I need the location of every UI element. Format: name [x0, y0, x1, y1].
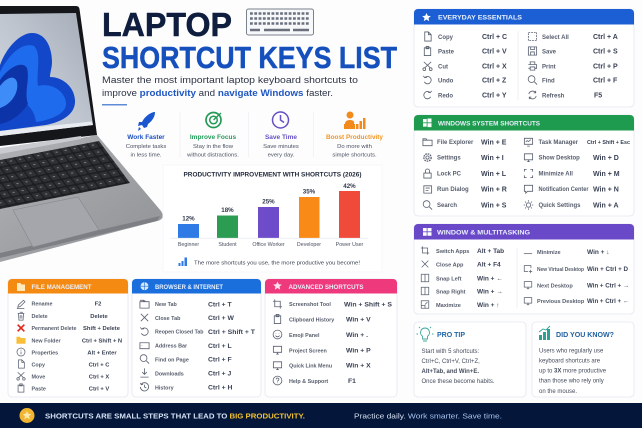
footer message: SHORTCUTS ARE SMALL STEPS THAT LEAD TO BIG PRODUCTIVITY.	[45, 411, 305, 420]
chart values: 18%	[221, 207, 234, 214]
chart category labels: Developer	[297, 242, 321, 248]
shortcut rows: Close Tab	[155, 316, 181, 322]
title	[102, 7, 397, 75]
shortcut rows	[140, 300, 256, 392]
shortcut rows: Copy	[438, 35, 454, 41]
shortcut rows: Next Desktop	[537, 284, 573, 290]
shortcut rows: Screenshot Tool	[289, 302, 331, 308]
panel: pro tip	[414, 322, 526, 397]
shortcut rows	[423, 32, 618, 100]
chart category labels: Student	[218, 242, 237, 248]
shortcut rows: Alt + F4	[477, 262, 501, 268]
shortcut rows: Refresh	[542, 94, 565, 100]
shortcut rows: Address Bar	[155, 344, 188, 350]
shortcut rows: Win + S	[481, 202, 507, 210]
shortcut rows: Ctrl + C	[89, 362, 110, 368]
shortcut rows: Ctrl + A	[593, 34, 618, 41]
shortcut rows: Print	[542, 64, 556, 70]
icon: keyboard	[246, 9, 314, 35]
shortcut rows: Win + M	[593, 171, 620, 178]
shortcut rows: Save	[542, 50, 557, 56]
header: file management: FILE MANAGEMENT	[32, 284, 92, 291]
shortcut rows: Ctrl + P	[593, 64, 618, 70]
icon: person with chart	[344, 112, 366, 129]
shortcut rows: Paste	[438, 50, 455, 56]
shortcut rows: Task Manager	[538, 140, 579, 146]
shortcut rows: Find on Page	[155, 358, 189, 364]
shortcut rows: New Folder	[32, 338, 61, 344]
tip text: Alt+Tab, and Win+E.	[422, 369, 479, 375]
shortcut rows: Ctrl + V	[482, 48, 507, 56]
shortcut rows: Close App	[436, 262, 464, 268]
header: window and multitasking	[414, 224, 634, 240]
shortcut rows: Undo	[438, 78, 454, 84]
shortcut rows: Ctrl + Shift + T	[208, 329, 256, 336]
shortcut rows: Settings	[437, 156, 461, 162]
shortcut rows: Paste	[32, 386, 46, 392]
benefit: save time: every day.	[268, 152, 295, 158]
bar chart panel	[163, 165, 382, 272]
benefit: boost productivity: Do more with	[337, 144, 372, 150]
subtitle	[102, 75, 358, 99]
laptop illustration	[0, 6, 163, 262]
shortcut rows: Move	[32, 374, 45, 380]
shortcut rows: New Virtual Desktop	[537, 267, 584, 273]
shortcut rows: History	[155, 386, 174, 392]
shortcut rows: Run Dialog	[437, 187, 469, 193]
shortcut rows: Copy	[32, 362, 45, 368]
shortcut rows: Ctrl + X	[482, 64, 507, 70]
accent rule	[102, 104, 127, 106]
benefit: save time	[263, 112, 299, 158]
fact text: up to 3X more productive	[539, 368, 607, 374]
benefit: improve focus: Stay in the flow	[193, 144, 234, 150]
shortcut rows: Quick Link Menu	[289, 364, 332, 370]
fact text: Users who regularly use	[539, 349, 604, 355]
icon: rocket	[138, 112, 155, 131]
header: everyday essentials	[414, 9, 634, 24]
shortcut rows: Ctrl + Shift + Esc	[587, 140, 630, 146]
shortcut rows: Ctrl + V	[89, 386, 109, 392]
shortcut rows: F1	[348, 378, 356, 385]
shortcut rows: Win + X	[346, 362, 371, 370]
header: windows system shortcuts: WINDOWS SYSTEM SHORTCUTS	[438, 120, 541, 128]
chart values	[182, 183, 356, 222]
shortcut rows: Win + E	[481, 140, 507, 146]
shortcut rows: Permanent Delete	[32, 326, 76, 332]
shortcut rows: Delete	[90, 314, 108, 320]
shortcut rows: Snap Left	[436, 276, 462, 282]
title: LAPTOP	[102, 7, 232, 44]
chart title: PRODUCTIVITY IMPROVEMENT WITH SHORTCUTS (2026)	[184, 172, 362, 178]
shortcut rows: Win + I	[481, 155, 504, 162]
benefit: work faster	[126, 112, 166, 158]
shortcut rows: Ctrl + Z	[482, 78, 507, 84]
shortcut rows: Snap Right	[436, 289, 466, 295]
fact text: than those who rely only	[539, 378, 604, 384]
shortcut rows: Win + →	[477, 288, 503, 296]
shortcut rows: Win + P	[346, 348, 371, 354]
subtitle: improve productivity and navigate Windows faster.	[102, 88, 333, 99]
benefit: work faster: Work Faster	[127, 134, 165, 141]
shortcut rows	[273, 299, 392, 385]
shortcut rows: Ctrl + C	[482, 34, 507, 41]
shortcut rows: Ctrl + H	[208, 384, 232, 392]
shortcut rows: Minimize	[537, 250, 561, 256]
icon: mini chart	[178, 258, 187, 266]
tip text	[422, 349, 495, 385]
shortcut rows: Rename	[32, 302, 52, 308]
shortcut rows: Show Desktop	[538, 156, 580, 162]
benefit: boost productivity	[326, 112, 383, 158]
shortcut rows: Project Screen	[289, 348, 327, 354]
benefit dividers	[180, 112, 314, 157]
shortcut rows: Cut	[438, 64, 448, 70]
shortcut rows: Win + N	[593, 186, 619, 194]
shortcut rows: Switch Apps	[436, 249, 469, 255]
title: SHORTCUT KEYS LIST	[102, 40, 397, 75]
fact text	[539, 349, 607, 395]
benefit: save time: Save Time	[265, 134, 297, 141]
shortcut rows: Ctrl + W	[208, 315, 234, 322]
shortcut rows: Ctrl + S	[593, 48, 618, 56]
shortcut rows: Previous Desktop	[537, 299, 585, 305]
subtitle: Master the most important laptop keyboard shortcuts to	[102, 75, 358, 86]
shortcut rows: Win + .	[346, 332, 368, 339]
icon: growth chart	[539, 326, 550, 340]
panel: window and multitasking	[414, 224, 634, 314]
chart category labels: Beginner	[178, 242, 199, 248]
benefit: boost productivity: Boost Productivity	[326, 134, 383, 141]
shortcut rows	[421, 246, 629, 309]
tip text: Ctrl+C, Ctrl+V, Ctrl+Z,	[422, 359, 480, 365]
shortcut rows: Shift + Delete	[83, 326, 121, 332]
shortcut rows: Win + R	[481, 186, 507, 194]
shortcut rows: New Tab	[155, 302, 177, 308]
panel: browser and internet	[132, 279, 261, 397]
shortcut rows: Properties	[32, 350, 58, 356]
shortcut rows: Ctrl + T	[208, 302, 232, 308]
shortcut rows: Delete	[32, 314, 48, 320]
shortcut rows: Help & Support	[289, 379, 328, 385]
panel: windows system shortcuts	[414, 115, 634, 216]
footer banner	[0, 403, 642, 428]
footer tagline: Practice daily. Work smarter. Save time.	[354, 411, 502, 420]
heading: PRO TIP	[437, 332, 465, 339]
shortcut rows: Downloads	[155, 372, 184, 378]
shortcut rows: Win + L	[481, 171, 507, 178]
shortcut rows: Alt + Tab	[477, 248, 504, 255]
shortcut rows: Win + ↓	[587, 249, 610, 256]
shortcut rows: Ctrl + L	[208, 343, 232, 350]
shortcut rows: Reopen Closed Tab	[155, 330, 204, 336]
shortcut rows: F2	[95, 302, 101, 308]
benefit: improve focus: without distractions.	[186, 152, 239, 158]
shortcut rows: Ctrl + J	[208, 370, 231, 378]
benefit: improve focus: Improve Focus	[190, 134, 237, 141]
chart values: 35%	[303, 188, 316, 196]
shortcut rows: Notification Center	[538, 187, 589, 193]
fact text: on the mouse.	[539, 389, 577, 395]
shortcut rows: File Explorer	[437, 140, 474, 146]
benefit: improve focus	[186, 112, 239, 158]
header: windows system shortcuts	[414, 115, 634, 130]
chart values: 42%	[343, 183, 356, 190]
shortcut rows: Ctrl + F	[593, 78, 618, 84]
shortcut rows: Win + Ctrl + ←	[587, 298, 629, 305]
shortcut rows: Maximize	[436, 303, 461, 309]
shortcut rows	[17, 300, 122, 392]
chart baseline	[170, 237, 368, 239]
panel: advanced shortcuts	[265, 279, 397, 397]
panel: everyday essentials	[414, 9, 634, 107]
shortcut rows: Ctrl + Shift + N	[82, 338, 122, 344]
chart category labels: Power User	[336, 242, 364, 248]
shortcut rows: Win + Ctrl + D	[587, 266, 628, 273]
shortcut rows: Ctrl + X	[89, 374, 109, 380]
chart values: 12%	[182, 216, 195, 222]
shortcut rows: Emoji Panel	[289, 333, 320, 339]
header: browser and internet: BROWSER & INTERNET	[155, 284, 223, 291]
shortcut rows	[423, 138, 630, 210]
header: everyday essentials: EVERYDAY ESSENTIALS	[438, 14, 523, 22]
shortcut rows: Search	[437, 203, 457, 209]
shortcut rows: F5	[594, 92, 602, 100]
tip text: Once these become habits.	[422, 379, 495, 385]
benefit: save time: Save minutes	[263, 144, 299, 150]
shortcut rows: Select All	[542, 35, 569, 41]
shortcut rows: Clipboard History	[289, 318, 334, 324]
shortcut rows: Ctrl + F	[208, 356, 232, 364]
shortcut rows: Win + ←	[477, 276, 503, 282]
chart values: 25%	[262, 198, 275, 206]
benefit: boost productivity: simple shortcuts.	[332, 152, 377, 158]
shortcut rows: Lock PC	[437, 172, 462, 178]
shortcut rows: Win + V	[346, 316, 371, 324]
shortcut rows: Find	[542, 78, 555, 84]
benefit: work faster: in less time.	[130, 152, 162, 158]
shortcut rows: Minimize All	[538, 172, 573, 178]
panel: did you know	[532, 322, 634, 397]
shortcut rows: Win + D	[593, 155, 619, 162]
shortcut rows: Win + Ctrl + →	[587, 282, 629, 290]
shortcut rows: Quick Settings	[538, 203, 581, 209]
header: window and multitasking: WINDOW & MULTITASKING	[437, 230, 530, 236]
shortcut rows: Win + ↑	[477, 302, 500, 309]
header: advanced shortcuts: ADVANCED SHORTCUTS	[288, 284, 364, 291]
chart bars	[178, 191, 360, 238]
icon: star badge	[20, 408, 34, 423]
benefit: work faster: Complete tasks	[126, 144, 166, 150]
panel: file management	[8, 279, 128, 397]
fact text: keyboard shortcuts are	[539, 359, 601, 365]
chart category labels	[178, 242, 364, 248]
shortcut rows: Win + A	[593, 202, 619, 210]
icon: clock	[272, 112, 288, 128]
shortcut rows: Redo	[438, 94, 453, 100]
tip text: Start with 5 shortcuts:	[422, 349, 480, 355]
shortcut rows: Alt + Enter	[87, 350, 117, 356]
chart category labels: Office Worker	[252, 242, 285, 248]
shortcut rows: Win + Shift + S	[344, 301, 392, 308]
chart footnote: The more shortcuts you use, the more productive you become!	[194, 260, 360, 266]
icon: target	[206, 112, 221, 128]
icon: light bulb	[416, 327, 434, 341]
heading: DID YOU KNOW?	[556, 332, 614, 339]
shortcut rows: Ctrl + Y	[482, 92, 507, 100]
